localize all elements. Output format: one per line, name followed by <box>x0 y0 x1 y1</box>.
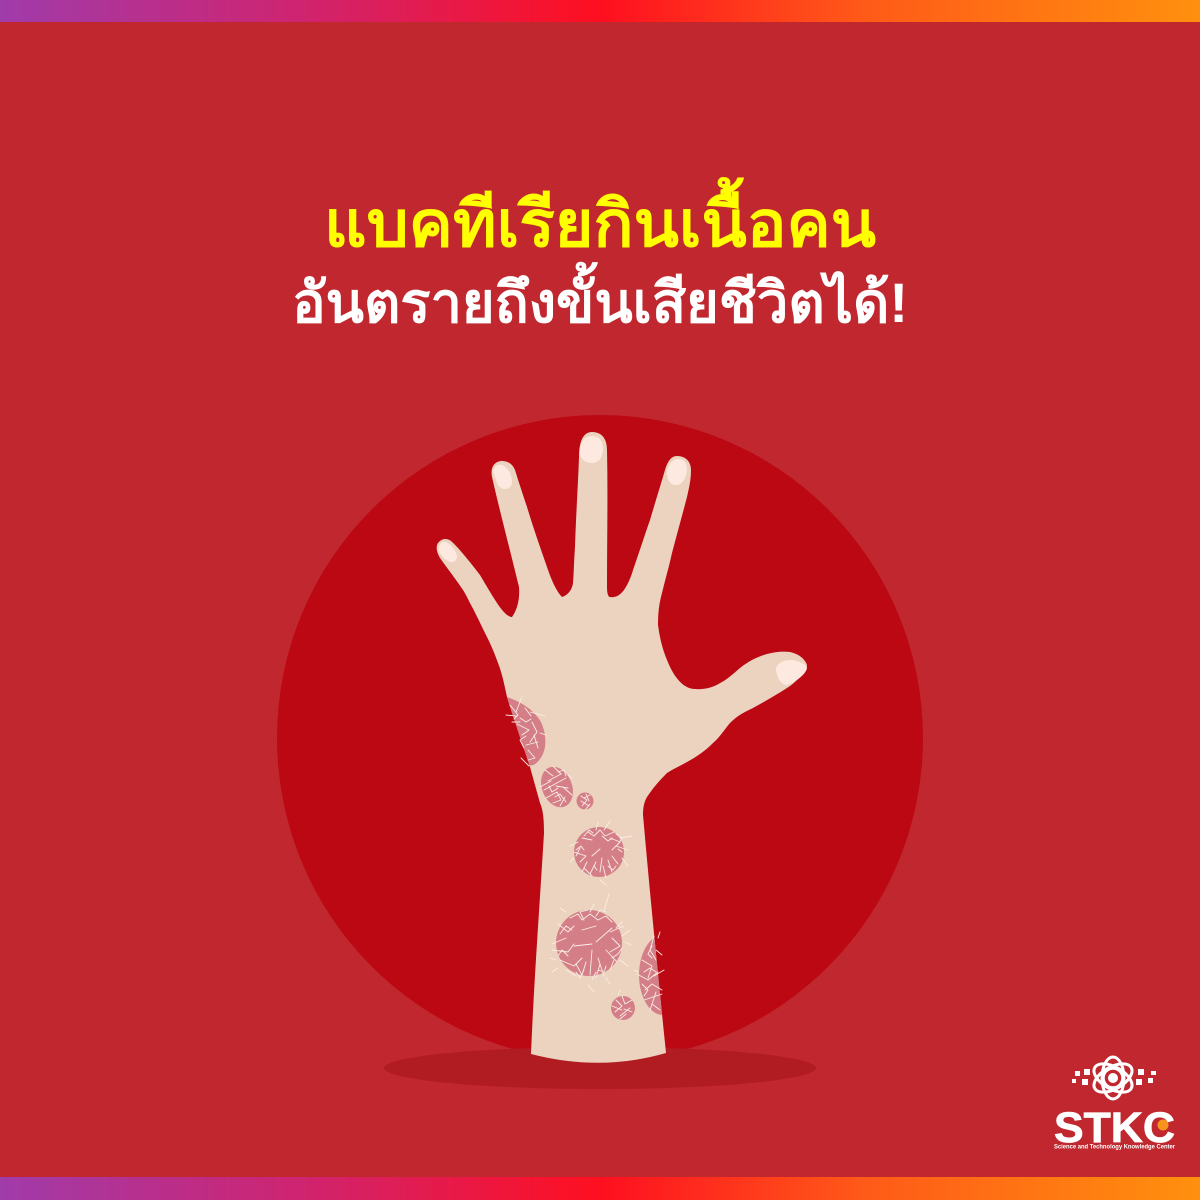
title <box>292 177 908 334</box>
bottom gradient bar <box>0 1177 1200 1200</box>
lesion: large round <box>556 910 622 976</box>
skin lesions <box>507 697 662 1020</box>
STKC logo <box>1054 1057 1176 1152</box>
hand illustration <box>437 432 807 1063</box>
logo wordmark: STKC <box>1054 1104 1175 1152</box>
logo atom icon <box>1089 1057 1137 1099</box>
logo pixel dots <box>1072 1069 1156 1085</box>
lesion: palm edge <box>507 697 545 765</box>
thumb nail <box>776 660 807 685</box>
hand silhouette <box>437 432 807 1063</box>
lesion: forearm edge <box>639 938 662 1015</box>
ground shadow <box>384 1047 816 1089</box>
nails <box>439 436 807 685</box>
dark red circle <box>277 415 923 1061</box>
lesion: oval wrist <box>541 766 573 808</box>
lesion: middle round <box>574 827 624 877</box>
pinky nail <box>439 542 457 562</box>
lesion hairs <box>506 697 664 1019</box>
title line 2: อันตรายถึงขั้นเสียชีวิตได้! <box>292 262 908 334</box>
index nail <box>667 459 687 485</box>
lesion: small round <box>611 996 635 1020</box>
logo orange dot <box>1158 1120 1168 1130</box>
ring nail <box>493 465 512 489</box>
title line 1: แบคทีเรียกินเนื้อคน <box>324 177 876 260</box>
logo tagline: Science and Technology Knowledge Center <box>1054 1144 1176 1150</box>
lesion: tiny dot <box>576 792 594 810</box>
top gradient bar <box>0 0 1200 22</box>
middle nail <box>580 436 603 463</box>
